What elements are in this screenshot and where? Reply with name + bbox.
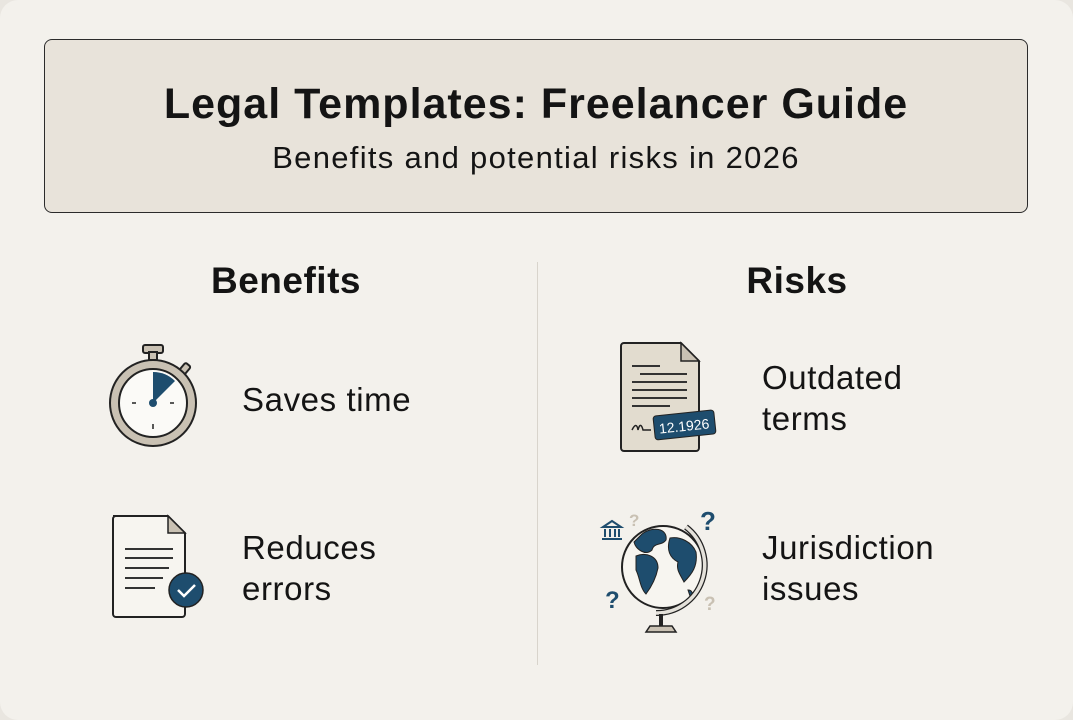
icon: stopwatch: [109, 344, 197, 447]
icon: globe: ?: [700, 506, 716, 536]
text: outdated terms: terms: [762, 400, 848, 437]
header box: [44, 39, 1028, 213]
text: jurisdiction issues: Jurisdiction: [762, 529, 934, 566]
text: reduces errors: errors: [242, 570, 332, 607]
heading: Benefits: Benefits: [211, 260, 361, 301]
subtitle: Benefits and potential risks in 2026: [272, 140, 800, 175]
text: saves time: Saves time: [242, 381, 411, 418]
icon: globe: [600, 506, 716, 633]
text: jurisdiction issues: [762, 529, 934, 607]
icon: globe: ?: [629, 511, 639, 530]
icon: outdated document: [620, 341, 716, 452]
text: outdated terms: [762, 359, 903, 437]
text: reduces errors: [242, 529, 376, 607]
title: Legal Templates: Freelancer Guide: [164, 80, 908, 128]
heading: Risks: Risks: [746, 260, 848, 301]
icon: globe: ?: [704, 594, 716, 615]
icon: globe: ?: [605, 587, 620, 614]
icon: document check: [112, 514, 204, 618]
icon: outdated document: 12.1926: [658, 415, 710, 437]
text: outdated terms: Outdated: [762, 359, 903, 396]
text: reduces errors: Reduces: [242, 529, 376, 566]
text: jurisdiction issues: issues: [762, 570, 859, 607]
